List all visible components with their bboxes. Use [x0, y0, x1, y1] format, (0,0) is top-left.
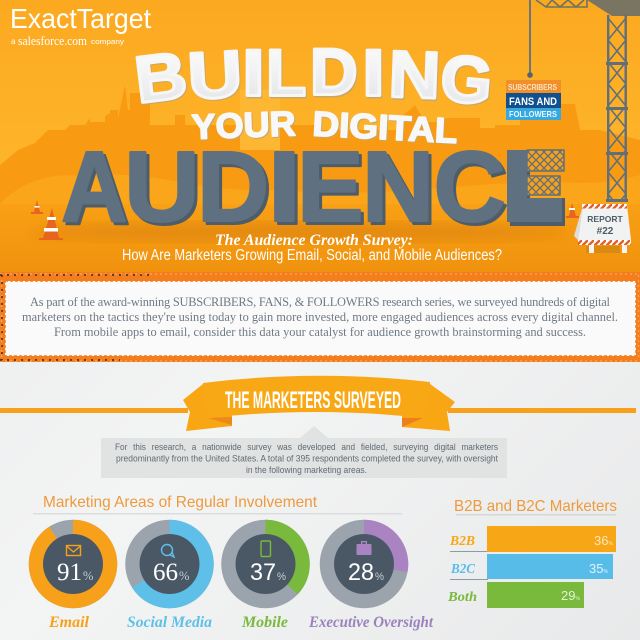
title: BUILDING: B — [131, 38, 191, 117]
donut labels: Email — [48, 614, 90, 631]
callout: survey description: in the following marketing areas. — [246, 464, 367, 475]
bar: B2B 36%: B2B — [449, 534, 475, 549]
callout: survey description: For this research, a nationwide survey was developed and fielded, surveying digital marketers — [115, 441, 498, 452]
icon: speech bubble — [162, 544, 174, 557]
subtitle: How Are Marketers Growing Email, Social, and Mobile Audiences? — [122, 247, 502, 264]
title: BUILDING: B — [132, 39, 192, 118]
title: YOUR DIGITAL — [191, 104, 459, 152]
donut chart: social media 66%: % — [179, 569, 189, 583]
introduction text: marketers on the tactics they're using today to gain more invested, more engaged audiences across every digital channel. — [22, 310, 618, 324]
icon: phone — [261, 541, 270, 556]
donut labels: Social Media — [127, 614, 212, 631]
title: AUDIENCE: N — [362, 131, 434, 243]
bar: B2C 35%: B2C — [450, 562, 476, 577]
title: AUDIENCE: D — [200, 134, 272, 246]
donut chart: mobile 37%: % — [277, 571, 286, 583]
title: BUILDING: L — [267, 37, 307, 111]
title: BUILDING: G — [439, 41, 496, 119]
logo: ExactTarget: salesforce.com — [18, 34, 87, 48]
title: BUILDING: N — [388, 38, 443, 114]
title: BUILDING: I — [362, 35, 385, 110]
donut labels: Mobile — [241, 614, 288, 631]
bar chart: B2B and B2C — [447, 526, 616, 608]
donut chart: social media 66% — [132, 527, 206, 601]
ground — [0, 204, 640, 272]
title: BUILDING — [131, 34, 496, 119]
donut chart: email 91% — [36, 527, 110, 601]
title: YOUR DIGITAL: YOUR — [192, 105, 297, 148]
panel: introduction — [0, 272, 640, 362]
introduction text: As part of the award-winning SUBSCRIBERS, FANS, & FOLLOWERS research series, we surveyed hundreds of digital — [30, 295, 611, 309]
title: BUILDING: I — [242, 35, 265, 110]
bar: both 29%: 29% — [561, 588, 580, 603]
donut labels: Executive Oversight — [308, 614, 434, 631]
bar: B2B 36% — [449, 526, 616, 552]
title: AUDIENCE: C — [436, 134, 509, 246]
donut chart: email 91%: % — [83, 569, 93, 583]
title: AUDIENCE: A — [61, 131, 127, 243]
title: AUDIENCE: D — [197, 131, 269, 243]
title: BUILDING: D — [311, 36, 359, 110]
logo: ExactTarget: ExactTarget — [10, 3, 151, 34]
title: AUDIENCE: N — [365, 134, 437, 246]
title: AUDIENCE: I — [270, 134, 305, 245]
introduction text — [22, 295, 618, 339]
title: BUILDING: I — [363, 37, 386, 111]
title: YOUR DIGITAL: DIGITAL — [313, 106, 459, 152]
title: BUILDING: U — [186, 37, 244, 113]
letter E with scaffold — [507, 150, 565, 226]
skyline — [0, 85, 640, 205]
sign: subscribers fans and followers: SUBSCRIBERS — [508, 83, 558, 92]
sign: report 22: #22 — [597, 226, 614, 237]
crane — [527, 0, 640, 202]
title: BUILDING: D — [310, 34, 358, 108]
introduction text: From mobile apps to email, consider this data your catalyst for audience growth brainstorming and success. — [54, 325, 586, 339]
title: AUDIENCE: A — [64, 134, 130, 246]
subtitle: The Audience Growth Survey: — [215, 232, 413, 249]
title: AUDIENCE: U — [124, 130, 200, 242]
bar: B2B 36%: 36% — [594, 533, 613, 548]
heading: B2B and B2C marketers: B2B and B2C Marketers — [454, 498, 617, 515]
title: BUILDING: N — [387, 37, 442, 113]
icon: envelope — [66, 546, 80, 556]
logo: ExactTarget: . — [151, 24, 153, 30]
callout: survey description: predominantly from the United States. A total of 395 respondents completed the survey, with oversight — [116, 452, 498, 464]
title: AUDIENCE: C — [434, 131, 506, 243]
sign: subscribers fans and followers: FOLLOWERS — [509, 109, 557, 119]
logo: ExactTarget: company — [91, 39, 125, 46]
title: BUILDING: I — [243, 37, 266, 111]
callout: survey description — [101, 426, 507, 478]
title: AUDIENCE: E — [300, 134, 367, 246]
logo: ExactTarget — [10, 3, 153, 48]
title: AUDIENCE — [61, 130, 565, 246]
bar: both 29% — [447, 582, 584, 608]
title: AUDIENCE: U — [127, 133, 203, 245]
sign: report 22: REPORT — [587, 214, 624, 224]
sign: report 22 — [574, 204, 631, 253]
icon: briefcase — [356, 541, 372, 555]
donut chart: mobile 37%: 37 — [250, 559, 276, 586]
panel: header banner — [0, 0, 640, 272]
bar: B2C 35%: 35% — [589, 561, 608, 576]
heading: marketing areas: Marketing Areas of Regular Involvement — [43, 494, 318, 511]
donut chart: executive oversight 28% — [327, 527, 401, 601]
sign: subscribers fans and followers: FANS AND — [509, 96, 557, 108]
heading text: THE MARKETERS SURVEYED — [225, 387, 401, 414]
title: BUILDING: U — [187, 38, 245, 114]
title: BUILDING: G — [438, 40, 495, 118]
bar: B2C 35% — [450, 554, 613, 579]
donut labels — [48, 614, 434, 631]
donut chart: social media 66%: 66 — [153, 559, 178, 586]
title: BUILDING: L — [266, 36, 306, 110]
subtitle — [122, 232, 502, 264]
logo: ExactTarget: a — [11, 37, 16, 46]
icon: traffic cones — [31, 200, 579, 240]
donut chart: email 91%: 91 — [57, 559, 82, 586]
title: YOUR DIGITAL: DIGITAL — [312, 105, 458, 151]
donut chart: executive oversight 28%: 28 — [348, 559, 374, 586]
donut chart: executive oversight 28%: % — [375, 571, 384, 583]
sign: subscribers fans and followers — [506, 80, 561, 120]
title: AUDIENCE: I — [267, 131, 302, 242]
section heading: the marketers surveyed — [0, 376, 636, 431]
bar: both 29%: Both — [447, 590, 477, 605]
title: YOUR DIGITAL: YOUR — [191, 104, 296, 147]
title: AUDIENCE: E — [297, 131, 364, 243]
donut chart: mobile 37% — [228, 527, 302, 601]
